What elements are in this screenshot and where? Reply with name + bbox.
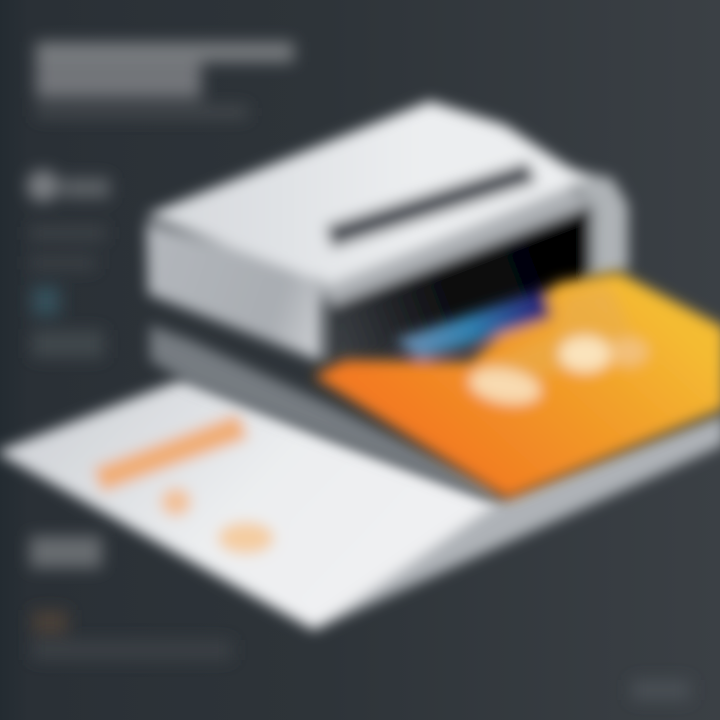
top face <box>146 101 590 284</box>
card <box>314 272 720 499</box>
blue print streak <box>395 288 552 360</box>
paper sheet <box>0 376 720 630</box>
card tan area <box>470 285 635 378</box>
lower left text block <box>30 536 232 660</box>
left list block <box>27 170 110 358</box>
front left face <box>146 222 322 362</box>
slot <box>330 205 595 368</box>
right side <box>560 168 628 278</box>
paper edge strip <box>314 414 720 630</box>
orange text on paper <box>94 414 274 554</box>
heading <box>36 42 294 118</box>
footer mark <box>632 680 690 700</box>
shelf under printer <box>150 325 500 500</box>
card white marks <box>467 336 648 409</box>
dark strip <box>326 162 536 248</box>
frame band above slot <box>318 185 592 306</box>
printer <box>146 101 628 500</box>
